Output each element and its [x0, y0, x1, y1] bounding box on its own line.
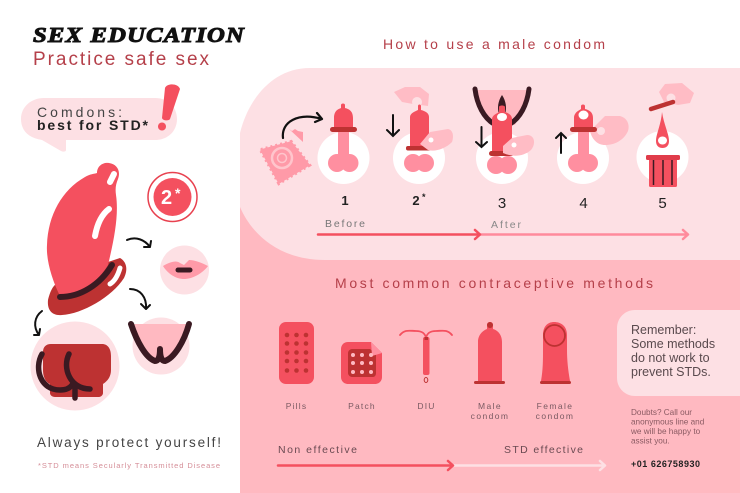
- icon: condom packet: [261, 129, 309, 183]
- label: DIU: DIU: [417, 401, 436, 411]
- icon: exclamation mark: [158, 84, 180, 130]
- speech bubble: best for STD*: [37, 117, 149, 133]
- heading: how to use: How to use a male condom: [383, 36, 605, 52]
- icon: front circle: [131, 318, 190, 374]
- label: male condom: condom: [471, 411, 509, 421]
- label: male condom: Male: [478, 401, 502, 411]
- arrow: STD effective: [453, 461, 605, 470]
- step 2: *: [422, 192, 426, 202]
- badge: 2*: [148, 172, 197, 222]
- icon: large condom: [47, 163, 126, 315]
- arrow: after: [480, 230, 688, 239]
- text: always protect yourself: Always protect yourself!: [37, 435, 221, 450]
- step 5: [636, 83, 694, 212]
- step 1: 1: [341, 193, 349, 208]
- step 1: [318, 104, 370, 208]
- step 5: 5: [658, 195, 667, 212]
- label: after: After: [491, 219, 522, 231]
- arrow: up step 4: [556, 133, 566, 153]
- arrow: before: [318, 230, 480, 239]
- text: doubts: anonymous line and: [631, 418, 705, 426]
- callout: remember: [617, 310, 740, 396]
- label: patch: Patch: [348, 401, 376, 411]
- arrow: down step 2: [387, 115, 399, 136]
- icon: mouth circle: [160, 246, 209, 294]
- step 2: [393, 87, 453, 208]
- label: STD effective: STD effective: [504, 444, 583, 456]
- text: phone: +01 626758930: [631, 459, 700, 469]
- panel: how to use: [240, 68, 740, 260]
- text: footnote: *STD means Secularly Transmitted Disease: [38, 461, 220, 470]
- subtitle: Practice safe sex: [33, 49, 210, 70]
- text: doubts: we will be happy to: [630, 427, 701, 436]
- step 3: 3: [498, 195, 506, 212]
- callout: remember: Remember:: [631, 323, 696, 337]
- arrow: non effective: [278, 461, 453, 470]
- step 4: 4: [579, 195, 588, 212]
- arrow: to rear: [34, 311, 42, 335]
- icon: pills: [279, 322, 314, 384]
- text: doubts: Doubts? Call our: [631, 408, 692, 417]
- icon: rear circle: [30, 322, 120, 410]
- heading: methods: Most common contraceptive methods: [335, 275, 653, 291]
- text: doubts: assist you.: [631, 436, 670, 446]
- step 3: [475, 89, 534, 212]
- speech bubble: [21, 98, 177, 152]
- icon: male condom: [474, 322, 505, 384]
- label: female condom: Female: [537, 401, 573, 411]
- step 4: [557, 104, 629, 212]
- badge: 2*: 2: [161, 187, 172, 209]
- arrow: to mouth: [127, 238, 151, 247]
- icon: patch: [341, 342, 382, 384]
- label: pills: Pills: [286, 401, 307, 411]
- arrow: to genital area: [130, 289, 150, 309]
- speech bubble: Comdons:: [37, 104, 122, 120]
- label: female condom: condom: [536, 411, 574, 421]
- label: non effective: Non effective: [278, 444, 357, 456]
- label: before: Before: [325, 218, 365, 230]
- icon: IUD: [400, 331, 452, 382]
- step 2: 2: [412, 193, 420, 208]
- callout: remember: do not work to: [631, 351, 710, 365]
- callout: remember: prevent STDs.: [631, 365, 711, 379]
- title: SEX EDUCATION: [33, 23, 245, 47]
- arrow: packet to step 1: [283, 113, 322, 138]
- icon: female condom: [540, 322, 571, 384]
- panel: effectiveness background: [240, 200, 740, 493]
- arrow: down step 3: [476, 127, 487, 147]
- badge: 2*: *: [175, 185, 181, 201]
- callout: remember: Some methods: [631, 337, 715, 351]
